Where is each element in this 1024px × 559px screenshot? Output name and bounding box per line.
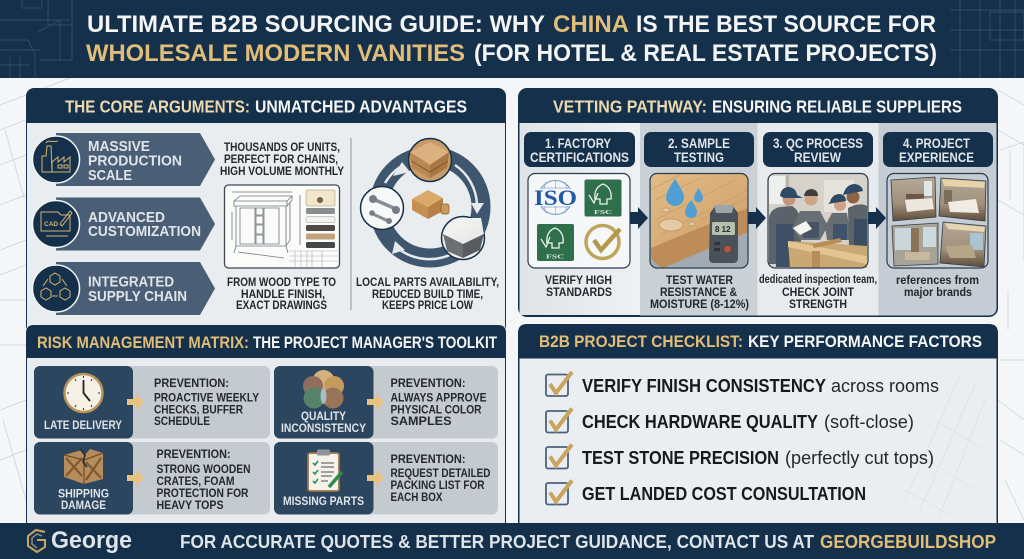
label: CUSTOMIZATION [88,223,201,240]
label: MASSIVE [88,138,150,155]
step 2 header: 2. SAMPLE [668,136,730,151]
prevention text: PACKING LIST FOR [390,478,485,492]
icon: factory [42,141,70,172]
text: from wood type: HANDLE FINISH, [241,287,325,301]
prevention text [390,452,491,504]
text: local parts: KEEPS PRICE LOW [382,298,473,312]
title line 2: (FOR HOTEL & REAL ESTATE PROJECTS) [474,40,937,67]
title line 1 [87,11,936,38]
text: thousands of units [220,140,344,178]
step 3 header: REVIEW [794,150,841,165]
checklist item 2 [546,408,914,432]
caption: inspection team: dedicated inspection team, [759,274,877,286]
text: thousands of units: HIGH VOLUME MONTHLY [220,164,344,178]
heading: core arguments: UNMATCHED ADVANTAGES [255,96,467,116]
image: vanity technical drawing with swatches [224,185,340,268]
prevention text [156,447,251,512]
label [58,486,109,512]
step 2 header: TESTING [674,150,724,165]
panel: vetting pathway [518,88,998,317]
prevention text [154,376,259,428]
title line 2: WHOLESALE MODERN VANITIES [86,40,465,67]
chevron: advanced customization [32,198,215,250]
photo 2 [939,178,986,221]
diagram: supply chain ring [360,138,484,260]
step 1 header [524,132,635,167]
photo 4 [940,222,986,267]
footer call to action: FOR ACCURATE QUOTES & BETTER PROJECT GUIDANCE, CONTACT US AT [180,531,815,552]
prevention text [390,376,486,428]
step 3 header [763,132,873,167]
checklist item 3 [546,444,934,468]
caption: test water [650,273,749,311]
text: local parts: REDUCED BUILD TIME, [372,287,483,301]
step 1 header: 1. FACTORY [545,136,611,151]
arrow 3 [868,207,886,229]
label: SCALE [88,167,132,184]
prevention text: PREVENTION: [156,447,230,461]
caption: inspection team [759,274,877,311]
risk card: quality inconsistency [274,366,498,438]
checklist item 1: VERIFY FINISH CONSISTENCY [582,375,827,396]
heading: vetting pathway [553,96,962,116]
caption: verify high standards: VERIFY HIGH [545,273,612,287]
caption: verify high standards [545,273,612,299]
arrow 1 [630,207,648,229]
step 1 header: CERTIFICATIONS [530,150,629,165]
heading: risk matrix [37,334,497,352]
icon: CAD drawing [41,211,72,236]
heading: checklist: B2B PROJECT CHECKLIST: [539,333,743,351]
checklist item 4 [546,480,866,504]
heading: vetting pathway: VETTING PATHWAY: [553,96,707,116]
text: thousands of units: PERFECT FOR CHAINS, [224,152,338,166]
caption: references: major brands [904,285,972,299]
heading: core arguments: THE CORE ARGUMENTS: [65,96,250,116]
image: certification logos [528,174,630,268]
label [88,138,182,184]
label: DAMAGE [61,498,106,512]
icon: broken crate [64,449,103,484]
icon: colour swatches [303,370,344,408]
text: local parts [356,275,499,312]
photo 3 [892,223,938,266]
caption: test water: TEST WATER [666,273,733,287]
image: hotel room references [887,174,988,268]
step 4 header [883,132,993,167]
caption: verify high standards: STANDARDS [546,285,612,299]
risk card: missing parts [274,442,498,514]
icon: clipboard [308,450,342,491]
label [281,409,366,435]
image: sample moisture test [650,174,748,268]
panel: risk matrix [26,325,506,523]
label [88,209,201,240]
label: SHIPPING [58,486,109,500]
icon: supply loop [41,273,70,300]
icon: moisture meter: 8 12 [715,225,731,234]
prevention text: STRONG WOODEN [156,462,251,476]
caption: inspection team: CHECK JOINT [782,285,854,299]
heading: vetting pathway: ENSURING RELIABLE SUPPLIERS [712,96,962,116]
label: INTEGRATED [88,274,174,290]
text: from wood type [227,275,336,312]
prevention text: CHECKS, BUFFER [154,402,243,416]
logo: George: George [51,527,132,554]
checklist item 3: (perfectly cut tops) [785,447,934,468]
risk card: late delivery [34,366,270,438]
prevention text: CRATES, FOAM [156,474,234,488]
arrow 2 [748,207,766,229]
prevention text: SAMPLES [390,414,452,428]
icon: gold check [586,226,620,258]
prevention text: PREVENTION: [154,376,229,390]
icon: stone slab [442,216,484,260]
image: QC inspection team [768,174,868,268]
checklist item 1 [546,372,939,396]
label: INCONSISTENCY [281,421,366,435]
label: QUALITY [301,409,346,423]
label [88,274,187,305]
heading: risk matrix: RISK MANAGEMENT MATRIX: [37,334,249,352]
checklist item 2: (soft-close) [824,411,914,432]
title line 2 [86,40,937,67]
text: from wood type: FROM WOOD TYPE TO [227,275,336,289]
chevron: integrated supply chain [32,262,215,315]
prevention text: HEAVY TOPS [156,498,224,512]
heading: core arguments [65,96,467,116]
prevention text: PREVENTION: [390,452,466,466]
title line 1: ULTIMATE B2B SOURCING GUIDE: WHY [87,11,545,38]
text: thousands of units: THOUSANDS OF UNITS, [224,140,340,154]
text: from wood type: EXACT DRAWINGS [236,298,327,312]
risk card: shipping damage [34,442,270,514]
checklist item 4: GET LANDED COST CONSULTATION [582,483,866,504]
prevention text: EACH BOX [390,490,443,504]
risk card: late delivery: LATE DELIVERY [44,418,122,432]
label: SUPPLY CHAIN [88,288,187,305]
label: PRODUCTION [88,152,182,170]
prevention text: REQUEST DETAILED [390,466,491,480]
icon: CAD drawing: CAD [44,221,58,228]
photo 1 [891,177,936,221]
prevention text: PREVENTION: [390,376,466,390]
prevention text: PHYSICAL COLOR [390,402,482,416]
footer bar [0,523,1024,559]
arrow [367,470,384,486]
step 4 header: EXPERIENCE [899,150,974,165]
prevention text: ALWAYS APPROVE [390,390,486,404]
text: local parts: LOCAL PARTS AVAILABILITY, [356,275,499,289]
icon: FSC badge bottom: FSC [546,254,564,260]
heading: risk matrix: THE PROJECT MANAGER'S TOOLKIT [253,334,497,352]
chevron: massive production scale [32,133,215,186]
checklist item 1: across rooms [831,375,939,396]
heading: checklist [539,333,982,351]
icon: bolts [360,186,404,230]
checklist item 2: CHECK HARDWARE QUALITY [582,411,819,432]
water drops [666,179,703,218]
prevention text: SCHEDULE [154,414,210,428]
footer call to action: GEORGEBUILDSHOP [820,531,996,552]
header banner [0,0,1024,78]
checklist item 3: TEST STONE PRECISION [582,447,779,468]
caption: references: references from [896,273,979,287]
icon: wood layers [408,138,452,182]
prevention text: PROTECTION FOR [156,486,249,500]
prevention text: PROACTIVE WEEKLY [154,390,259,404]
caption: test water: RESISTANCE & [660,285,737,299]
caption: inspection team: STRENGTH [789,297,847,311]
risk card: missing parts: MISSING PARTS [283,494,364,508]
title line 1: CHINA [553,11,629,38]
caption: test water: MOISTURE (8-12%) [650,297,749,311]
step 4 header: 4. PROJECT [903,136,971,151]
label: ADVANCED [88,209,165,226]
icon: ISO: ISO [534,185,577,210]
step 2 header [644,132,754,167]
panel: core arguments [26,88,506,333]
icon: centre cabinet box [412,190,449,219]
icon: FSC badge top: FSC [594,209,612,216]
icon: clock [64,374,102,412]
arrow [367,394,384,410]
arrow [127,394,144,410]
heading: checklist: KEY PERFORMANCE FACTORS [748,333,982,351]
title line 1: IS THE BEST SOURCE FOR [636,11,936,38]
arrow [127,470,144,486]
panel: B2B checklist [518,324,998,524]
caption: references [896,273,979,299]
step 3 header: 3. QC PROCESS [773,136,863,151]
